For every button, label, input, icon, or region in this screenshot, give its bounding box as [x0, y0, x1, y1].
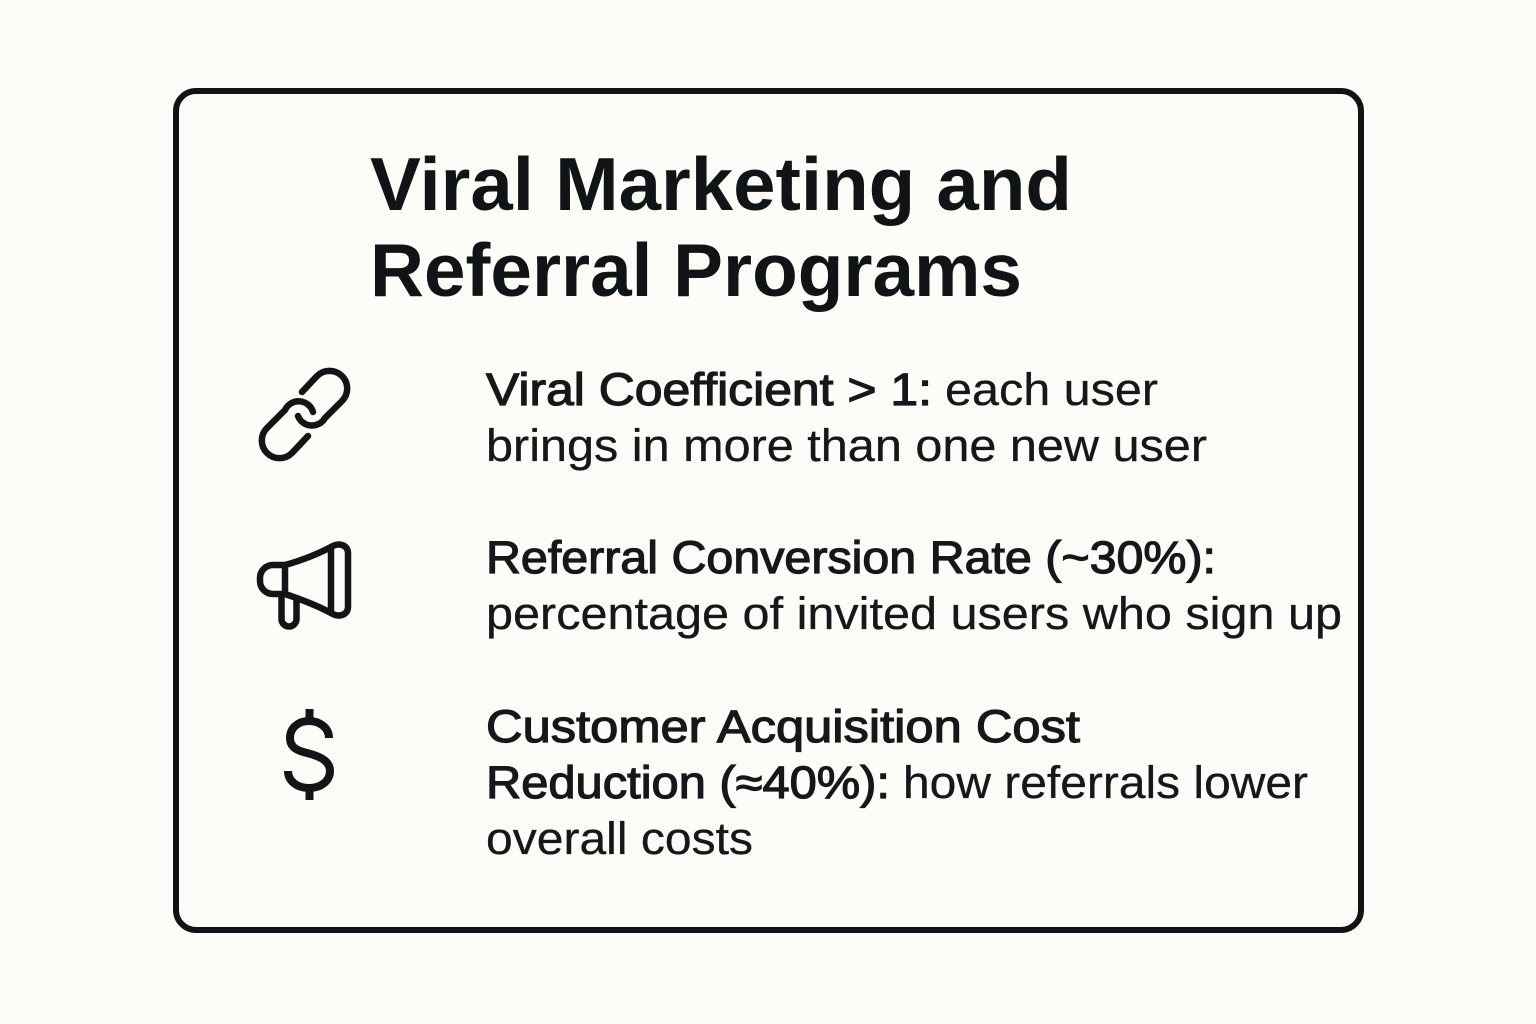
icon: megaphone — [260, 545, 348, 627]
text: acquisition cost description — [486, 701, 1308, 864]
text: referral conversion description — [486, 532, 1342, 639]
text: acquisition cost description: how referrals lower — [903, 757, 1308, 808]
text: referral conversion description: Referral Conversion Rate (~30%): — [486, 532, 1216, 583]
text: viral coefficient description: Viral Coefficient > 1: — [486, 364, 932, 415]
icon: chain link — [262, 371, 347, 458]
item: customer acquisition cost — [288, 701, 1308, 864]
item: referral conversion rate — [260, 532, 1342, 639]
text: viral coefficient description: each user — [945, 364, 1158, 415]
item: viral coefficient — [262, 364, 1207, 471]
icon: dollar sign — [288, 709, 330, 800]
title — [370, 142, 1072, 312]
panel: rounded frame — [176, 91, 1361, 930]
text: viral coefficient description — [486, 364, 1207, 471]
text: acquisition cost description: Reduction (≈40%): — [486, 757, 890, 808]
text: referral conversion description: percentage of invited users who sign up — [486, 588, 1342, 639]
text: viral coefficient description: brings in more than one new user — [486, 420, 1207, 471]
title: Referral Programs — [370, 228, 1022, 312]
text: acquisition cost description: overall costs — [486, 813, 753, 864]
title: Viral Marketing and — [370, 142, 1072, 226]
text: acquisition cost description: Customer Acquisition Cost — [486, 701, 1081, 752]
